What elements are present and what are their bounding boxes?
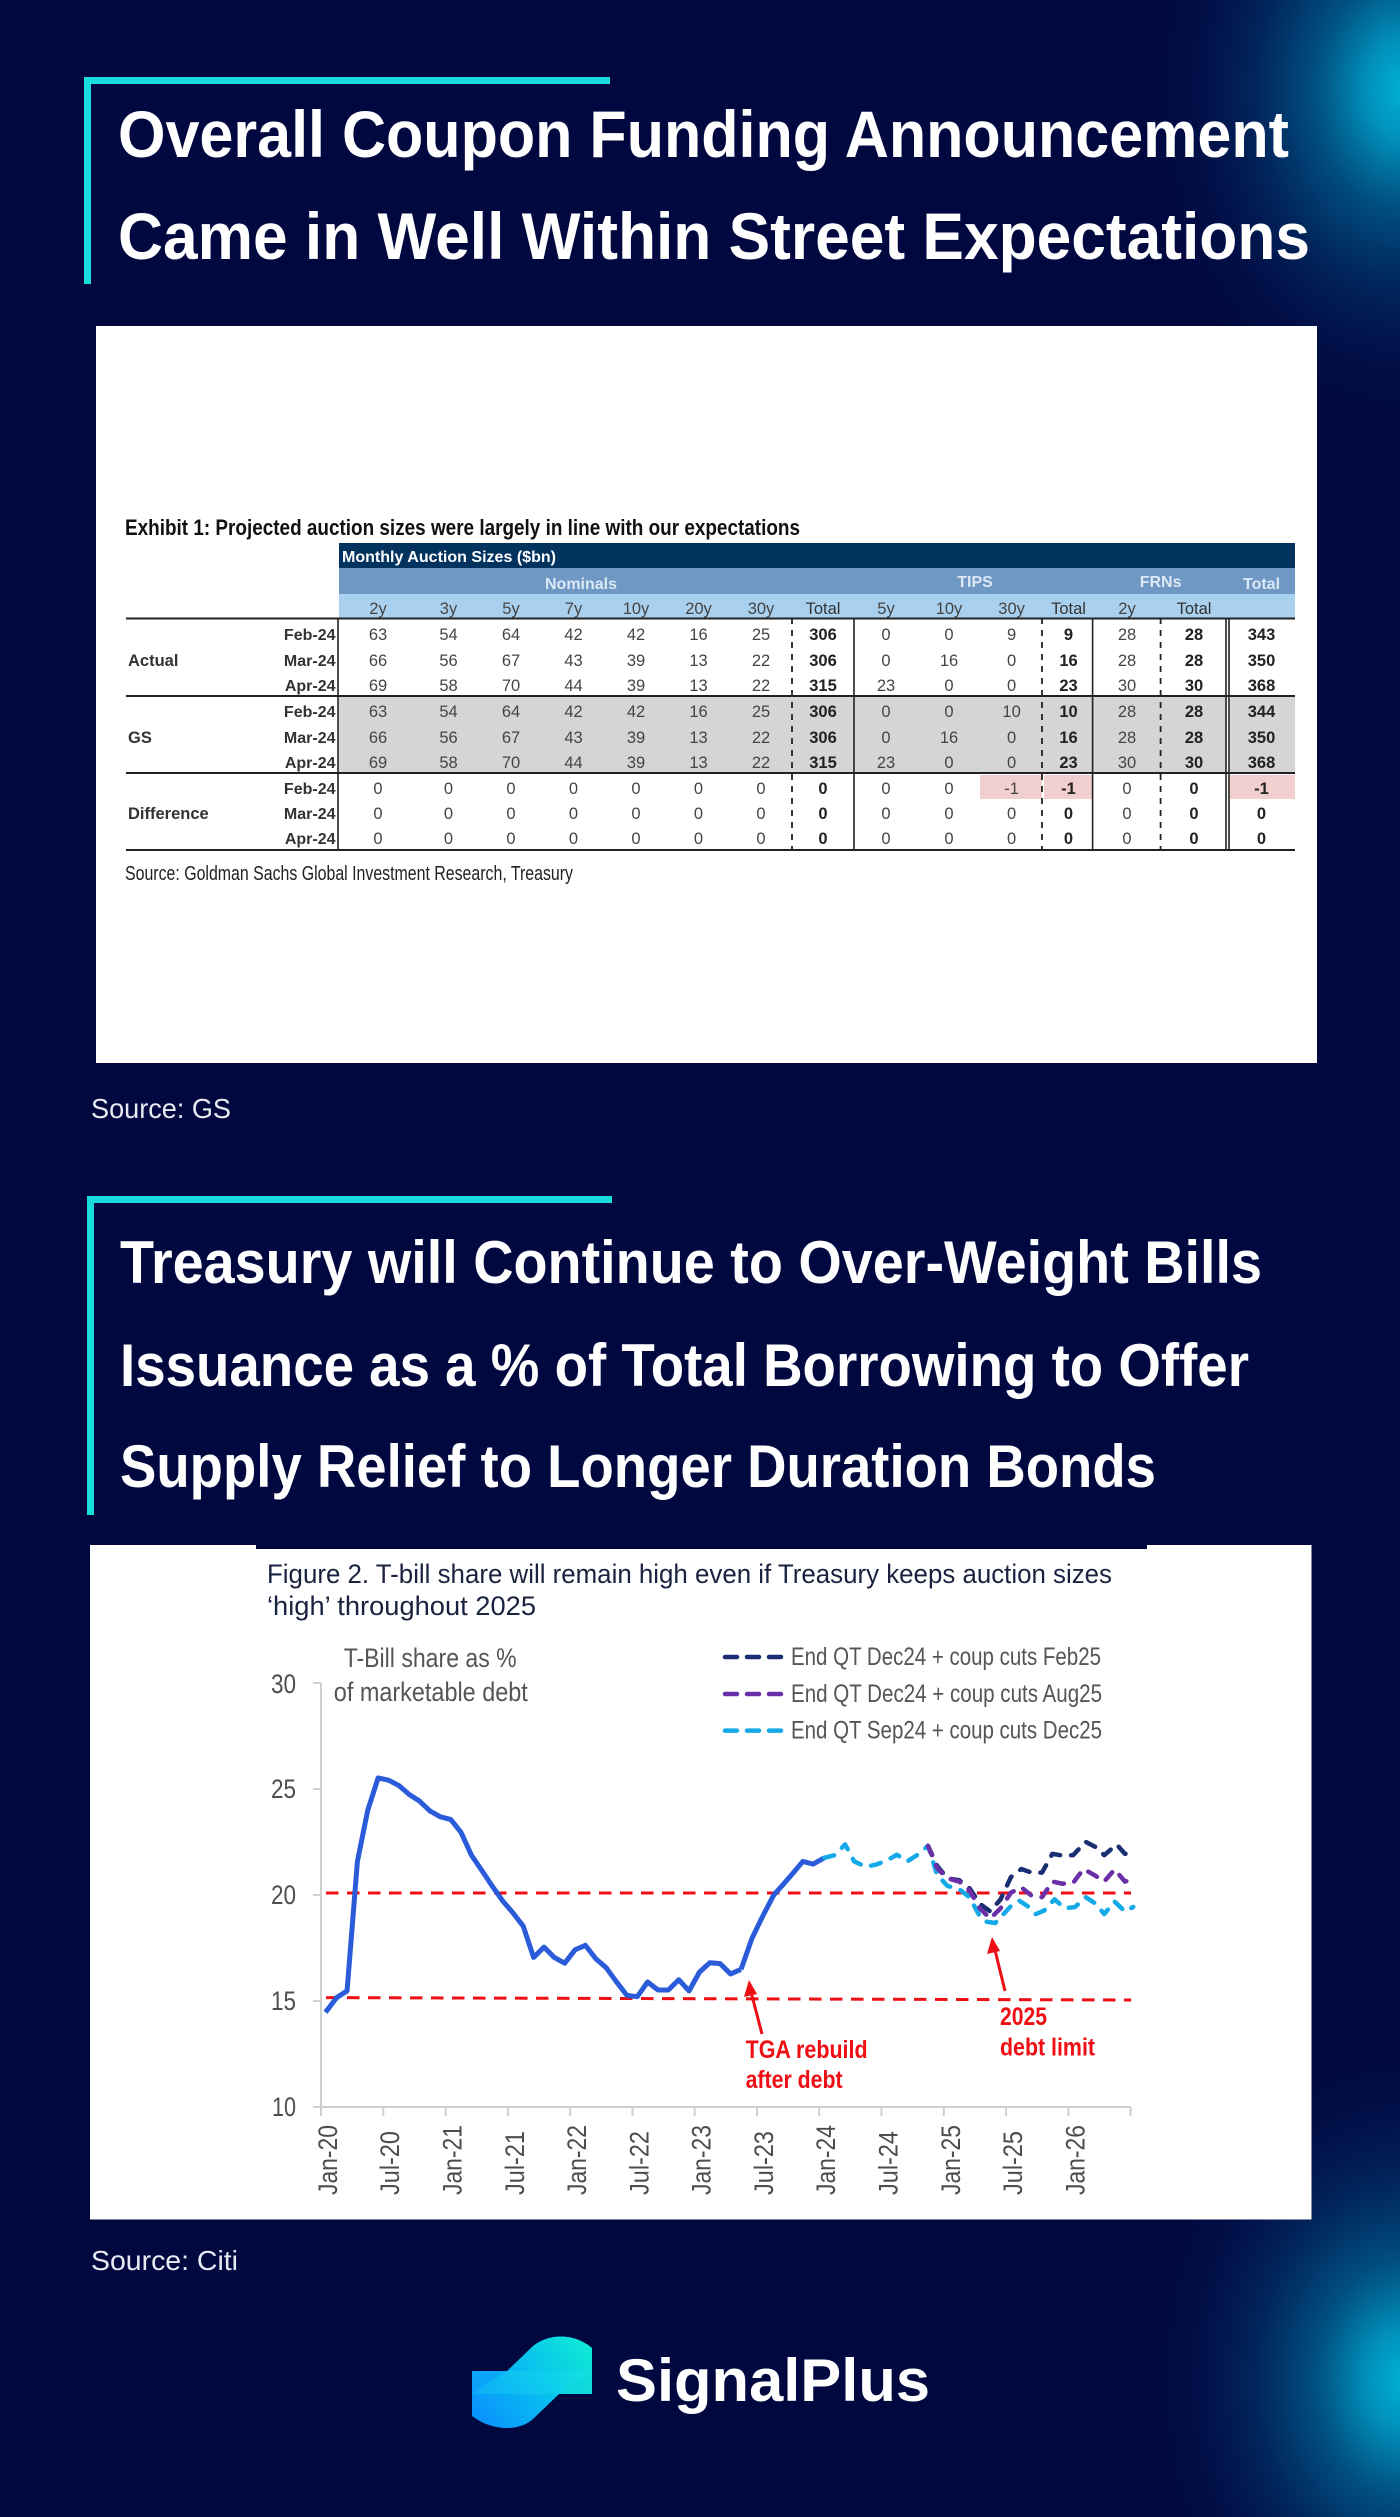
table values: 28 [1118,729,1136,747]
icon: SignalPlus mark [472,2336,592,2428]
table rules [126,618,1295,850]
table values: 0 [818,830,828,848]
table values: -1 [1004,780,1019,798]
source: Citi: Source: Citi [91,2245,238,2276]
table values: 350 [1248,652,1275,670]
table values: 9 [1007,626,1016,644]
table values: 0 [1189,830,1199,848]
table values: 67 [502,729,520,747]
table values: 0 [1122,780,1132,798]
annotation: 2025 debt limit [1000,2003,1096,2062]
annotation: TGA rebuild after debt: TGA rebuild [746,2036,868,2064]
panel: auction sizes table [96,326,1317,1063]
table values: 306 [809,703,837,721]
heading: section 2 [120,1229,1262,1500]
table values: 0 [944,626,954,644]
table values: 0 [881,652,891,670]
table values: -1 [1254,780,1269,798]
table values: 16 [940,729,958,747]
month labels [284,627,336,848]
table values: 344 [1248,703,1276,721]
month labels: Apr-24 [285,831,336,848]
table values: 25 [752,703,770,721]
month labels: Apr-24 [285,678,336,695]
table values: 30 [1185,677,1203,695]
table header: 10y [936,600,963,618]
table values: 0 [694,780,703,798]
table values: 0 [1189,780,1199,798]
table values: 56 [439,652,458,670]
table values: 58 [439,677,458,695]
table values: 0 [694,830,703,848]
table header: Total [1051,600,1086,618]
annotation: TGA rebuild after debt [746,2036,868,2094]
table values: 30 [1118,677,1136,695]
table values: 0 [944,754,954,772]
table values: 0 [881,703,891,721]
table values: 343 [1248,626,1275,644]
table values: 0 [818,780,828,798]
table header: 30y [998,600,1026,618]
table values: 13 [689,652,708,670]
heading frame: section 2 [87,1196,612,1515]
table values: 70 [502,754,520,772]
table header: 5y [877,600,895,618]
x-axis labels: Jul-21 [500,2131,530,2195]
table values: 10 [1002,703,1021,721]
table values: 54 [439,626,458,644]
x-axis labels [313,2125,1090,2195]
table source note: Source: Goldman Sachs Global Investment Research, Treasury [125,863,573,885]
x-axis labels: Jan-21 [438,2125,468,2195]
line: End QT Sep24 + coup cuts Dec25 [824,1844,1133,1923]
logo: SignalPlus [472,2336,930,2428]
heading: section 2: Treasury will Continue to Over-Weight Bills [120,1229,1262,1296]
legend: End QT Dec24 + coup cuts Feb25 [791,1643,1101,1671]
table values: 0 [881,805,891,823]
row group labels: GS [128,729,152,747]
table values: 0 [694,805,703,823]
table values: 39 [627,652,645,670]
legend: End QT Dec24 + coup cuts Aug25 [791,1680,1102,1708]
table values: 28 [1185,626,1203,644]
x-axis labels: Jul-23 [749,2131,779,2195]
table values: 0 [569,805,578,823]
table values: 0 [756,830,766,848]
table values: 0 [944,830,954,848]
table values: 23 [877,677,895,695]
table values: 22 [752,652,770,670]
table values: 16 [689,703,708,721]
table values: 0 [881,729,891,747]
row group labels: Actual [128,652,178,670]
table header: Monthly Auction Sizes ($bn) [342,549,556,566]
table values: 0 [944,780,954,798]
x-axis labels: Jul-22 [624,2131,654,2195]
month labels: Feb-24 [284,627,336,644]
line: End QT Dec24 + coup cuts Feb25 [928,1842,1133,1911]
x-axis labels: Jul-25 [998,2131,1028,2195]
table values: 67 [502,652,520,670]
table values: 44 [564,677,583,695]
source: GS: Source: GS [91,1093,231,1124]
table values: 368 [1248,677,1275,695]
table values: 23 [1059,754,1078,772]
annotation: 2025 debt limit: 2025 [1000,2003,1047,2031]
table values: 16 [1059,729,1078,747]
table values: 0 [373,805,383,823]
table values: 39 [627,677,645,695]
y-axis title [334,1643,528,1707]
table values: 0 [1007,805,1016,823]
panel: T-bill share chart [90,1545,1312,2220]
table values: 0 [1257,805,1266,823]
table values: 42 [564,626,583,644]
table values: 0 [1257,830,1266,848]
table values: 0 [1007,754,1016,772]
x-axis labels: Jan-24 [811,2125,841,2195]
table values: 0 [569,830,578,848]
heading: section 2: Supply Relief to Longer Duration Bonds [120,1433,1156,1500]
line: T-bill share history [325,1778,824,2012]
table values: 28 [1118,626,1136,644]
y-axis title: T-Bill share as % [344,1643,517,1673]
table values: 0 [881,780,891,798]
table values: 0 [881,830,891,848]
table values: 0 [1189,805,1199,823]
legend [725,1643,1102,1745]
table values: 42 [627,626,645,644]
line: End QT Dec24 + coup cuts Aug25 [928,1846,1133,1919]
table values: 0 [444,805,453,823]
table values: 0 [944,703,954,721]
table values: 0 [756,780,766,798]
table values: 58 [439,754,458,772]
annotation: TGA rebuild after debt: after debt [746,2066,843,2094]
table values: 28 [1185,703,1203,721]
table values: 66 [369,652,387,670]
table values: 350 [1248,729,1275,747]
table values: 63 [369,703,387,721]
heading frame: section 1 [84,77,610,284]
table values: 0 [756,805,766,823]
table values: 0 [444,780,453,798]
table values: 28 [1185,652,1203,670]
table values: 315 [809,677,837,695]
table values: 70 [502,677,520,695]
table header: FRNs [1140,574,1182,591]
table values: 16 [1059,652,1078,670]
table values: 69 [369,677,387,695]
table header: Total [1177,600,1211,618]
x-axis labels: Jul-20 [375,2131,405,2195]
table values: 28 [1118,652,1136,670]
chart title: ‘high’ throughout 2025 [267,1591,536,1621]
y-axis labels: 15 [271,1986,296,2016]
y-axis labels [271,1669,296,2122]
table header: 10y [623,600,650,618]
month labels: Feb-24 [284,704,336,721]
table values: 306 [809,652,837,670]
table values: 0 [1064,805,1073,823]
table values: 39 [627,729,645,747]
table values: 64 [502,626,520,644]
table header: TIPS [957,574,993,591]
row group labels [128,652,209,823]
table values: 368 [1248,754,1275,772]
table values: 0 [373,780,383,798]
table values: 0 [1007,830,1016,848]
table values: 30 [1118,754,1136,772]
table values: 39 [627,754,645,772]
table values: 30 [1185,754,1203,772]
table values: 0 [506,780,516,798]
heading: section 1: Overall Coupon Funding Announcement [118,97,1289,171]
table values: 64 [502,703,520,721]
table values: 28 [1118,703,1136,721]
x-axis labels: Jan-23 [687,2125,717,2195]
table header: Total [806,600,840,618]
table values: 16 [940,652,958,670]
table values: 10 [1059,703,1078,721]
table values: 306 [809,626,837,644]
table values: 0 [1122,805,1132,823]
table header: 2y [1118,600,1136,618]
month labels: Mar-24 [284,806,336,823]
arrow: 2025 debt limit [987,1937,1005,1991]
table values: 54 [439,703,458,721]
heading: section 1 [118,97,1310,273]
table values: 22 [752,729,770,747]
month labels: Mar-24 [284,730,336,747]
legend: End QT Sep24 + coup cuts Dec25 [791,1717,1102,1745]
row group labels: Difference [128,805,209,823]
x-axis labels: Jan-20 [313,2125,343,2195]
y-axis labels: 25 [271,1774,296,1804]
table header: 3y [440,600,458,618]
table values: 28 [1185,729,1203,747]
table values: 0 [631,830,641,848]
table values: 0 [373,830,383,848]
month labels: Feb-24 [284,781,336,798]
table values: 0 [631,780,641,798]
month labels: Apr-24 [285,755,336,772]
wordmark: SignalPlus [616,2347,930,2414]
table values: 13 [689,729,708,747]
table values: 23 [1059,677,1078,695]
y-axis labels: 10 [272,2092,296,2122]
table values: 0 [444,830,453,848]
table header: 20y [685,600,713,618]
y-axis labels: 20 [271,1880,296,1910]
table values: 63 [369,626,387,644]
x-axis labels: Jan-22 [562,2125,592,2195]
table values: 0 [631,805,641,823]
table header: 2y [369,600,387,618]
table values: 43 [564,729,583,747]
table values: 42 [564,703,583,721]
table values: 0 [1064,830,1073,848]
table values: 0 [944,677,954,695]
red reference lines [326,1893,1131,2000]
table header: Total [1243,576,1280,593]
table values: 16 [689,626,708,644]
x-axis labels: Jan-26 [1060,2125,1090,2195]
table header: 5y [502,600,520,618]
table values: 22 [752,677,770,695]
table header [339,543,1295,618]
table header: 30y [748,600,775,618]
table values: 315 [809,754,837,772]
y-axis labels: 30 [271,1669,296,1699]
table values: 25 [752,626,770,644]
table values: 66 [369,729,387,747]
table values: -1 [1061,780,1076,798]
table values: 0 [881,626,891,644]
table values: 0 [818,805,828,823]
table values: 306 [809,729,837,747]
axes [313,1683,1131,2116]
table shading [339,697,1295,799]
table title: Exhibit 1: Projected auction sizes were largely in line with our expectations [125,515,800,540]
table values: 0 [506,830,516,848]
table header: 7y [565,600,583,618]
table values: 43 [564,652,583,670]
x-axis labels: Jul-24 [874,2131,904,2195]
table values: 22 [752,754,770,772]
table values: 23 [877,754,895,772]
table values: 0 [1007,729,1016,747]
table values: 9 [1064,626,1073,644]
annotation: 2025 debt limit: debt limit [1000,2034,1096,2062]
table values: 0 [506,805,516,823]
table values: 13 [689,677,708,695]
table values: 0 [944,805,954,823]
table header: Nominals [545,576,617,593]
x-axis labels: Jan-25 [936,2125,966,2195]
table values: 42 [627,703,645,721]
chart title: Figure 2. T-bill share will remain high even if Treasury keeps auction sizes [267,1559,1112,1589]
table values: 69 [369,754,387,772]
table values: 56 [439,729,458,747]
table values: 13 [689,754,708,772]
table values: 44 [564,754,583,772]
table values: 0 [1007,677,1016,695]
table values [369,626,1276,848]
table values: 0 [569,780,578,798]
heading: section 1: Came in Well Within Street Expectations [118,199,1310,273]
heading: section 2: Issuance as a % of Total Borrowing to Offer [120,1332,1249,1399]
month labels: Mar-24 [284,653,336,670]
table values: 0 [1007,652,1016,670]
table values: 0 [1122,830,1132,848]
chart title [267,1559,1112,1621]
arrow: TGA rebuild [744,1980,762,2034]
y-axis title: of marketable debt [334,1677,528,1707]
